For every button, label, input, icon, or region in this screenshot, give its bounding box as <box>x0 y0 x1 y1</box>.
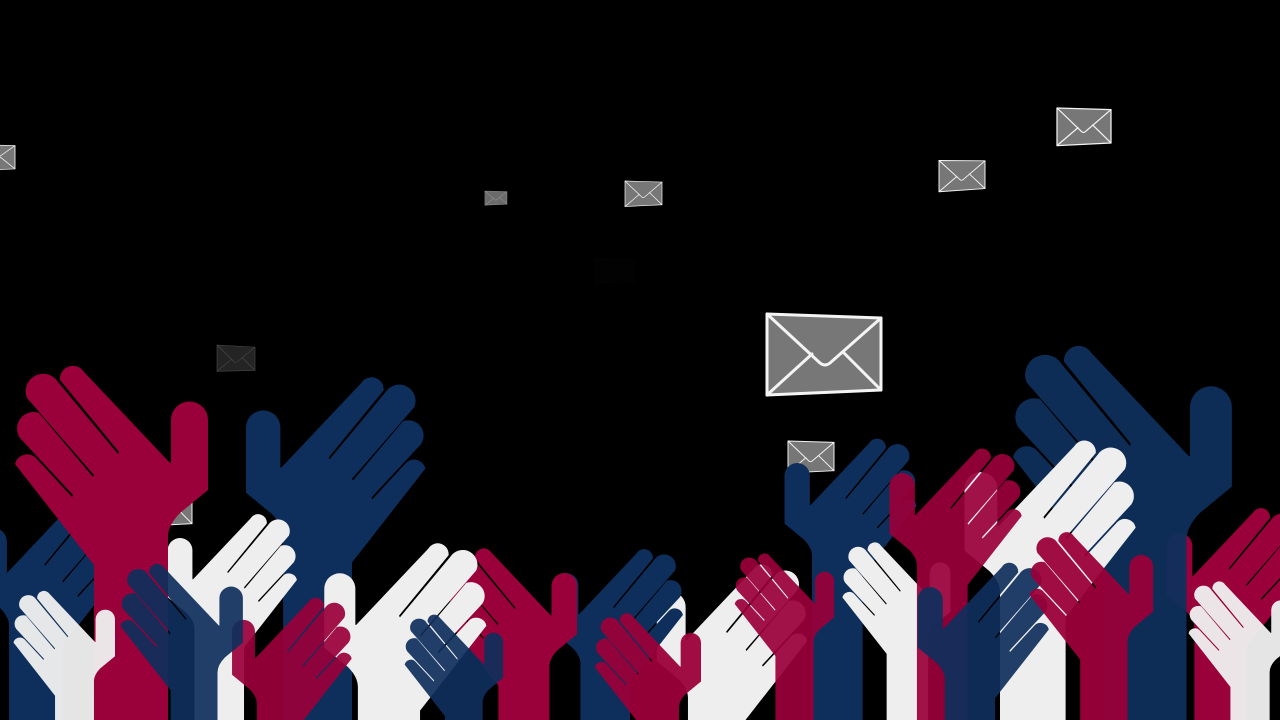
hand: large white centre left <box>324 543 486 720</box>
hand: small white centre right <box>842 542 950 720</box>
hand: red lower right <box>1030 532 1153 720</box>
hand: red centre <box>444 548 577 720</box>
hand: white left <box>168 514 297 720</box>
hands: left group <box>0 366 834 720</box>
envelope: top centre <box>625 181 662 207</box>
hand: large blue left <box>246 377 425 720</box>
envelope: large <box>767 314 881 395</box>
hands: right group <box>657 346 1280 720</box>
hand: large red left <box>15 366 208 720</box>
envelope: faint centre <box>595 258 635 284</box>
envelope: behind red hand <box>145 492 192 526</box>
hand: small blue centre <box>405 615 503 720</box>
hand: large blue right <box>1013 346 1232 720</box>
hand: blue centre <box>554 549 683 720</box>
hand: red far right <box>1166 508 1280 720</box>
hand: red overlapping white <box>890 449 1022 720</box>
hand: small red centre <box>595 613 701 720</box>
hand: white centre <box>657 564 807 720</box>
hand: small white far right <box>1189 581 1280 720</box>
hand: blue centre right <box>785 439 917 720</box>
envelope: far left <box>0 144 15 171</box>
envelope: small centre <box>485 191 507 205</box>
envelope: dim left <box>217 345 255 372</box>
hand: large white right <box>965 441 1136 720</box>
envelope: upper right <box>939 160 985 192</box>
hand: small red left <box>232 598 352 720</box>
hand: translucent blue left <box>121 564 243 720</box>
hand: small white left <box>13 591 115 720</box>
envelope: top right <box>1057 108 1111 146</box>
hand: translucent blue lower right <box>918 563 1049 720</box>
hand: blue far left <box>0 502 119 720</box>
envelope: behind blue hand <box>788 441 834 473</box>
hand: small red translucent <box>735 553 834 720</box>
